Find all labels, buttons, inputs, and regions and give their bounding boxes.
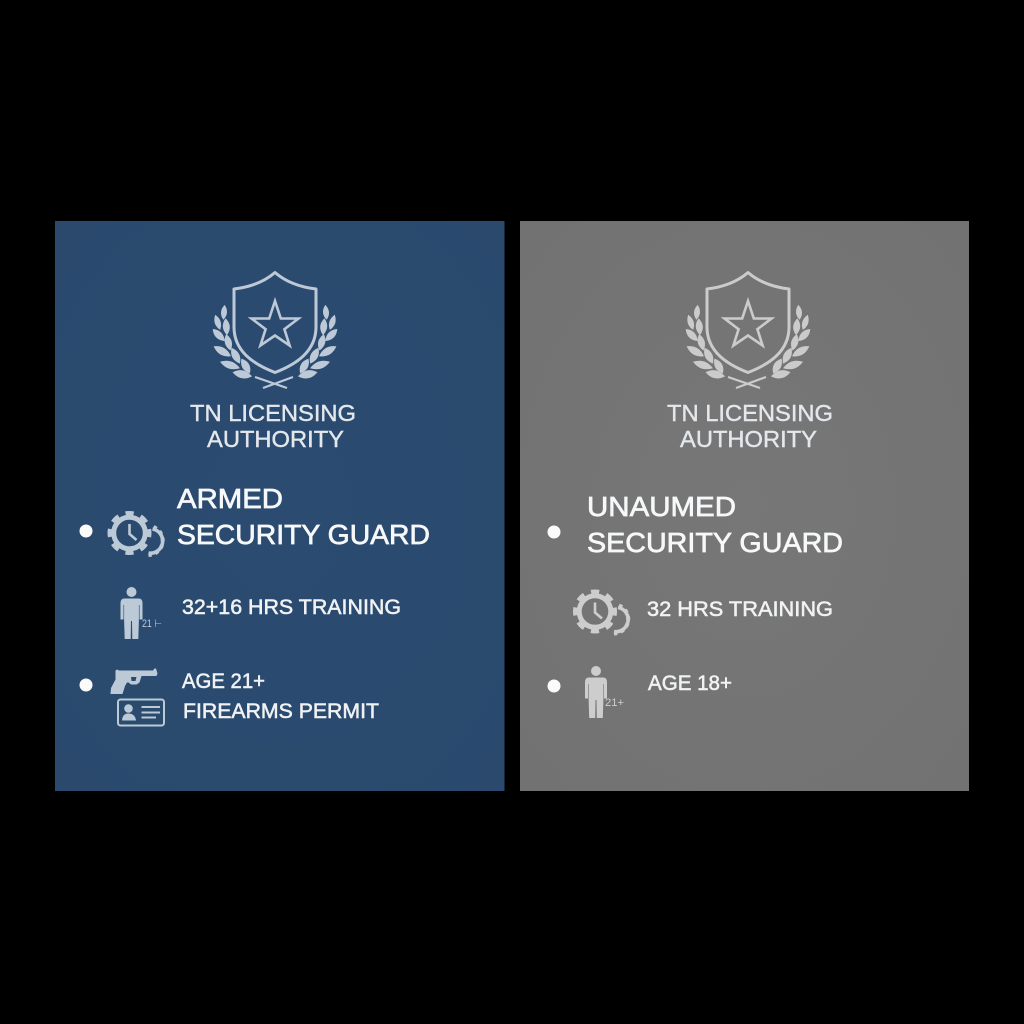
icon: person age: 21 ⊢ <box>142 618 162 630</box>
age requirement: AGE 18+ <box>648 672 732 695</box>
authority name: TN LICENSING <box>667 400 833 426</box>
authority name: AUTHORITY <box>207 426 344 452</box>
icon: clock gear <box>576 592 628 634</box>
age and permit requirements: FIREARMS PERMIT <box>183 700 379 723</box>
training hours: 32 HRS TRAINING <box>647 598 833 621</box>
authority name <box>190 400 356 452</box>
bullet <box>80 524 92 538</box>
bullet <box>80 678 92 692</box>
icon: handgun <box>110 668 158 694</box>
panel: armed security guard <box>55 221 504 791</box>
authority name <box>667 400 833 452</box>
bullet <box>548 526 560 538</box>
icon: person age <box>585 666 624 718</box>
heading: armed security guard: SECURITY GUARD <box>177 519 430 550</box>
training hours: 32+16 HRS TRAINING <box>182 596 401 619</box>
icon: person age <box>120 587 162 639</box>
heading: unarmed security guard: UNAUMED <box>587 491 736 522</box>
heading: armed security guard: ARMED <box>177 483 283 514</box>
heading: armed security guard <box>177 483 430 550</box>
heading: unarmed security guard: SECURITY GUARD <box>587 527 843 558</box>
authority name: TN LICENSING <box>190 400 356 426</box>
panel: unarmed security guard <box>520 221 969 791</box>
age and permit requirements <box>182 670 379 723</box>
bullet <box>548 680 560 692</box>
icon: person age: 21+ <box>605 697 624 709</box>
icon: clock gear <box>110 514 163 555</box>
authority name: AUTHORITY <box>680 426 817 452</box>
emblem: shield and laurel <box>683 272 813 388</box>
heading: unarmed security guard <box>587 491 843 558</box>
emblem: shield and laurel <box>210 272 340 388</box>
age and permit requirements: AGE 21+ <box>182 670 265 693</box>
icon: permit card <box>118 700 164 726</box>
